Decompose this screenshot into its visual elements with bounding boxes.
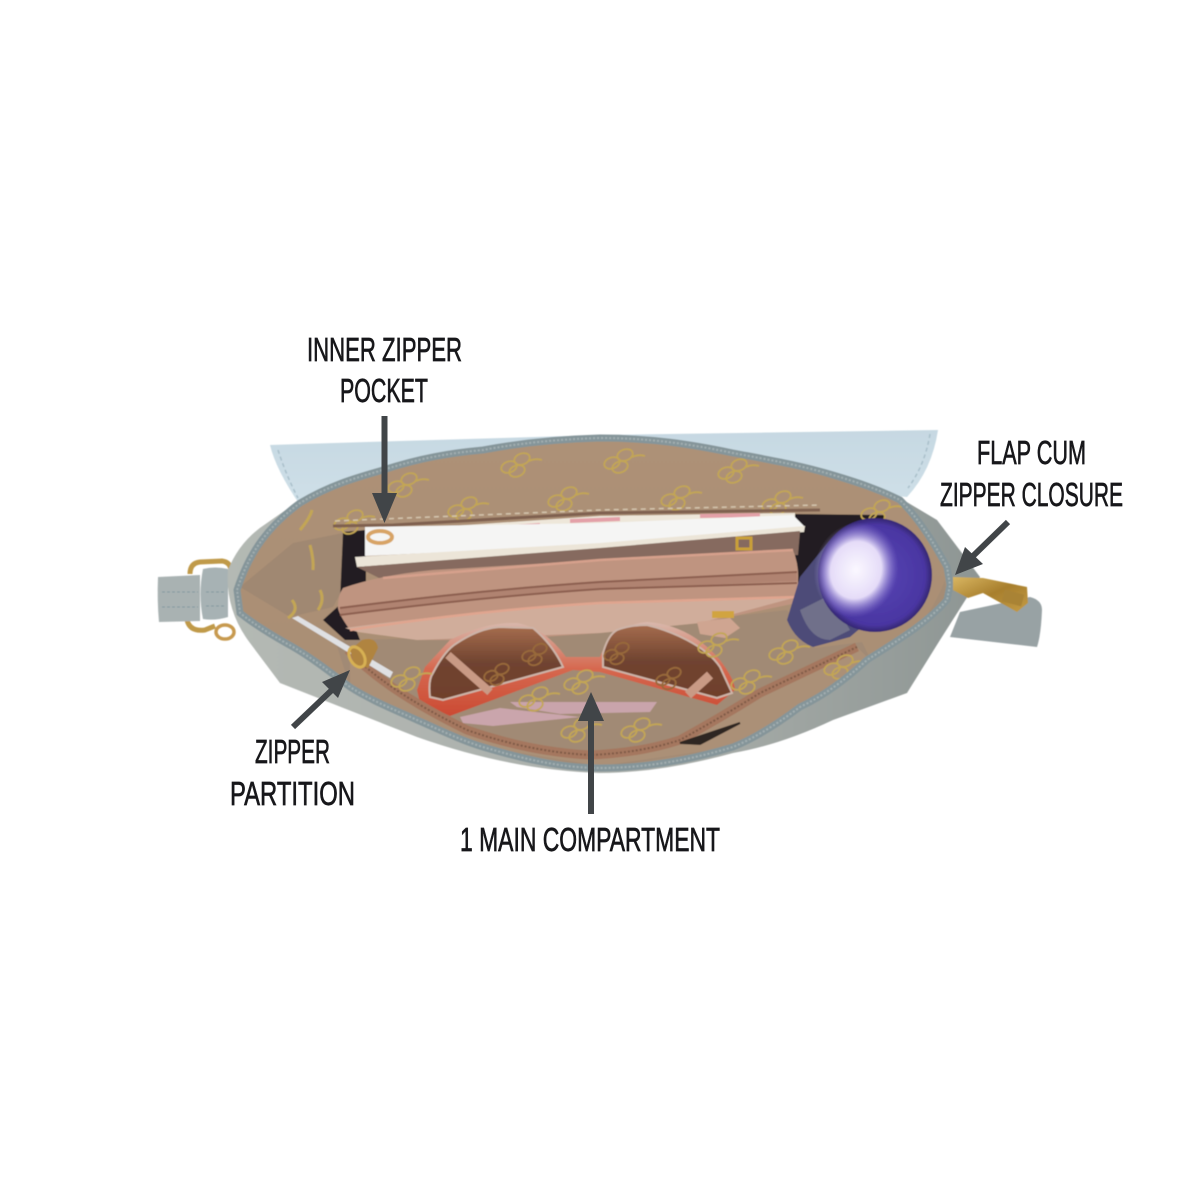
label: flap cum zipper closure xyxy=(940,434,1123,513)
interior dark gap below wallet xyxy=(323,600,360,640)
flap xyxy=(270,430,938,505)
front pocket with zipper partition xyxy=(348,631,870,766)
floor of bag xyxy=(335,610,870,768)
right strap xyxy=(950,597,1042,647)
lining right wedge xyxy=(880,580,947,655)
label: flap cum zipper closure: FLAP CUM xyxy=(977,434,1086,471)
left strap and rings xyxy=(158,561,234,639)
label: inner zipper pocket: INNER ZIPPER xyxy=(307,331,462,368)
sunglasses xyxy=(417,622,735,726)
purple bottle xyxy=(787,513,932,647)
zipper pull on pocket xyxy=(368,531,392,543)
lining xyxy=(237,438,950,768)
handbag photo xyxy=(158,430,1042,773)
outer body xyxy=(228,436,980,773)
label: zipper partition: ZIPPER xyxy=(255,733,330,770)
interior dark cavity right xyxy=(790,514,885,600)
wallet xyxy=(338,538,798,640)
label: inner zipper pocket xyxy=(307,331,462,409)
arrow: main compartment xyxy=(578,692,604,814)
inner pocket zip line xyxy=(333,510,820,526)
label: zipper partition xyxy=(230,733,355,812)
lining left side panel xyxy=(240,533,345,617)
white zipper tape and slider xyxy=(292,616,393,678)
arrow: flap closure xyxy=(955,522,1008,575)
arrow: inner zipper pocket xyxy=(372,416,397,523)
arrow: zipper partition xyxy=(293,670,350,727)
gold monogram pattern on lining xyxy=(288,447,902,618)
wallet clasp xyxy=(697,618,740,638)
main zipper pull xyxy=(953,577,1028,612)
label: main compartment: 1 MAIN COMPARTMENT xyxy=(460,821,720,858)
label: inner zipper pocket: POCKET xyxy=(340,372,428,409)
notebook xyxy=(355,513,805,580)
interior dark cavity left xyxy=(340,530,366,600)
outer zipper xyxy=(237,438,950,768)
label: zipper partition: PARTITION xyxy=(230,775,355,812)
